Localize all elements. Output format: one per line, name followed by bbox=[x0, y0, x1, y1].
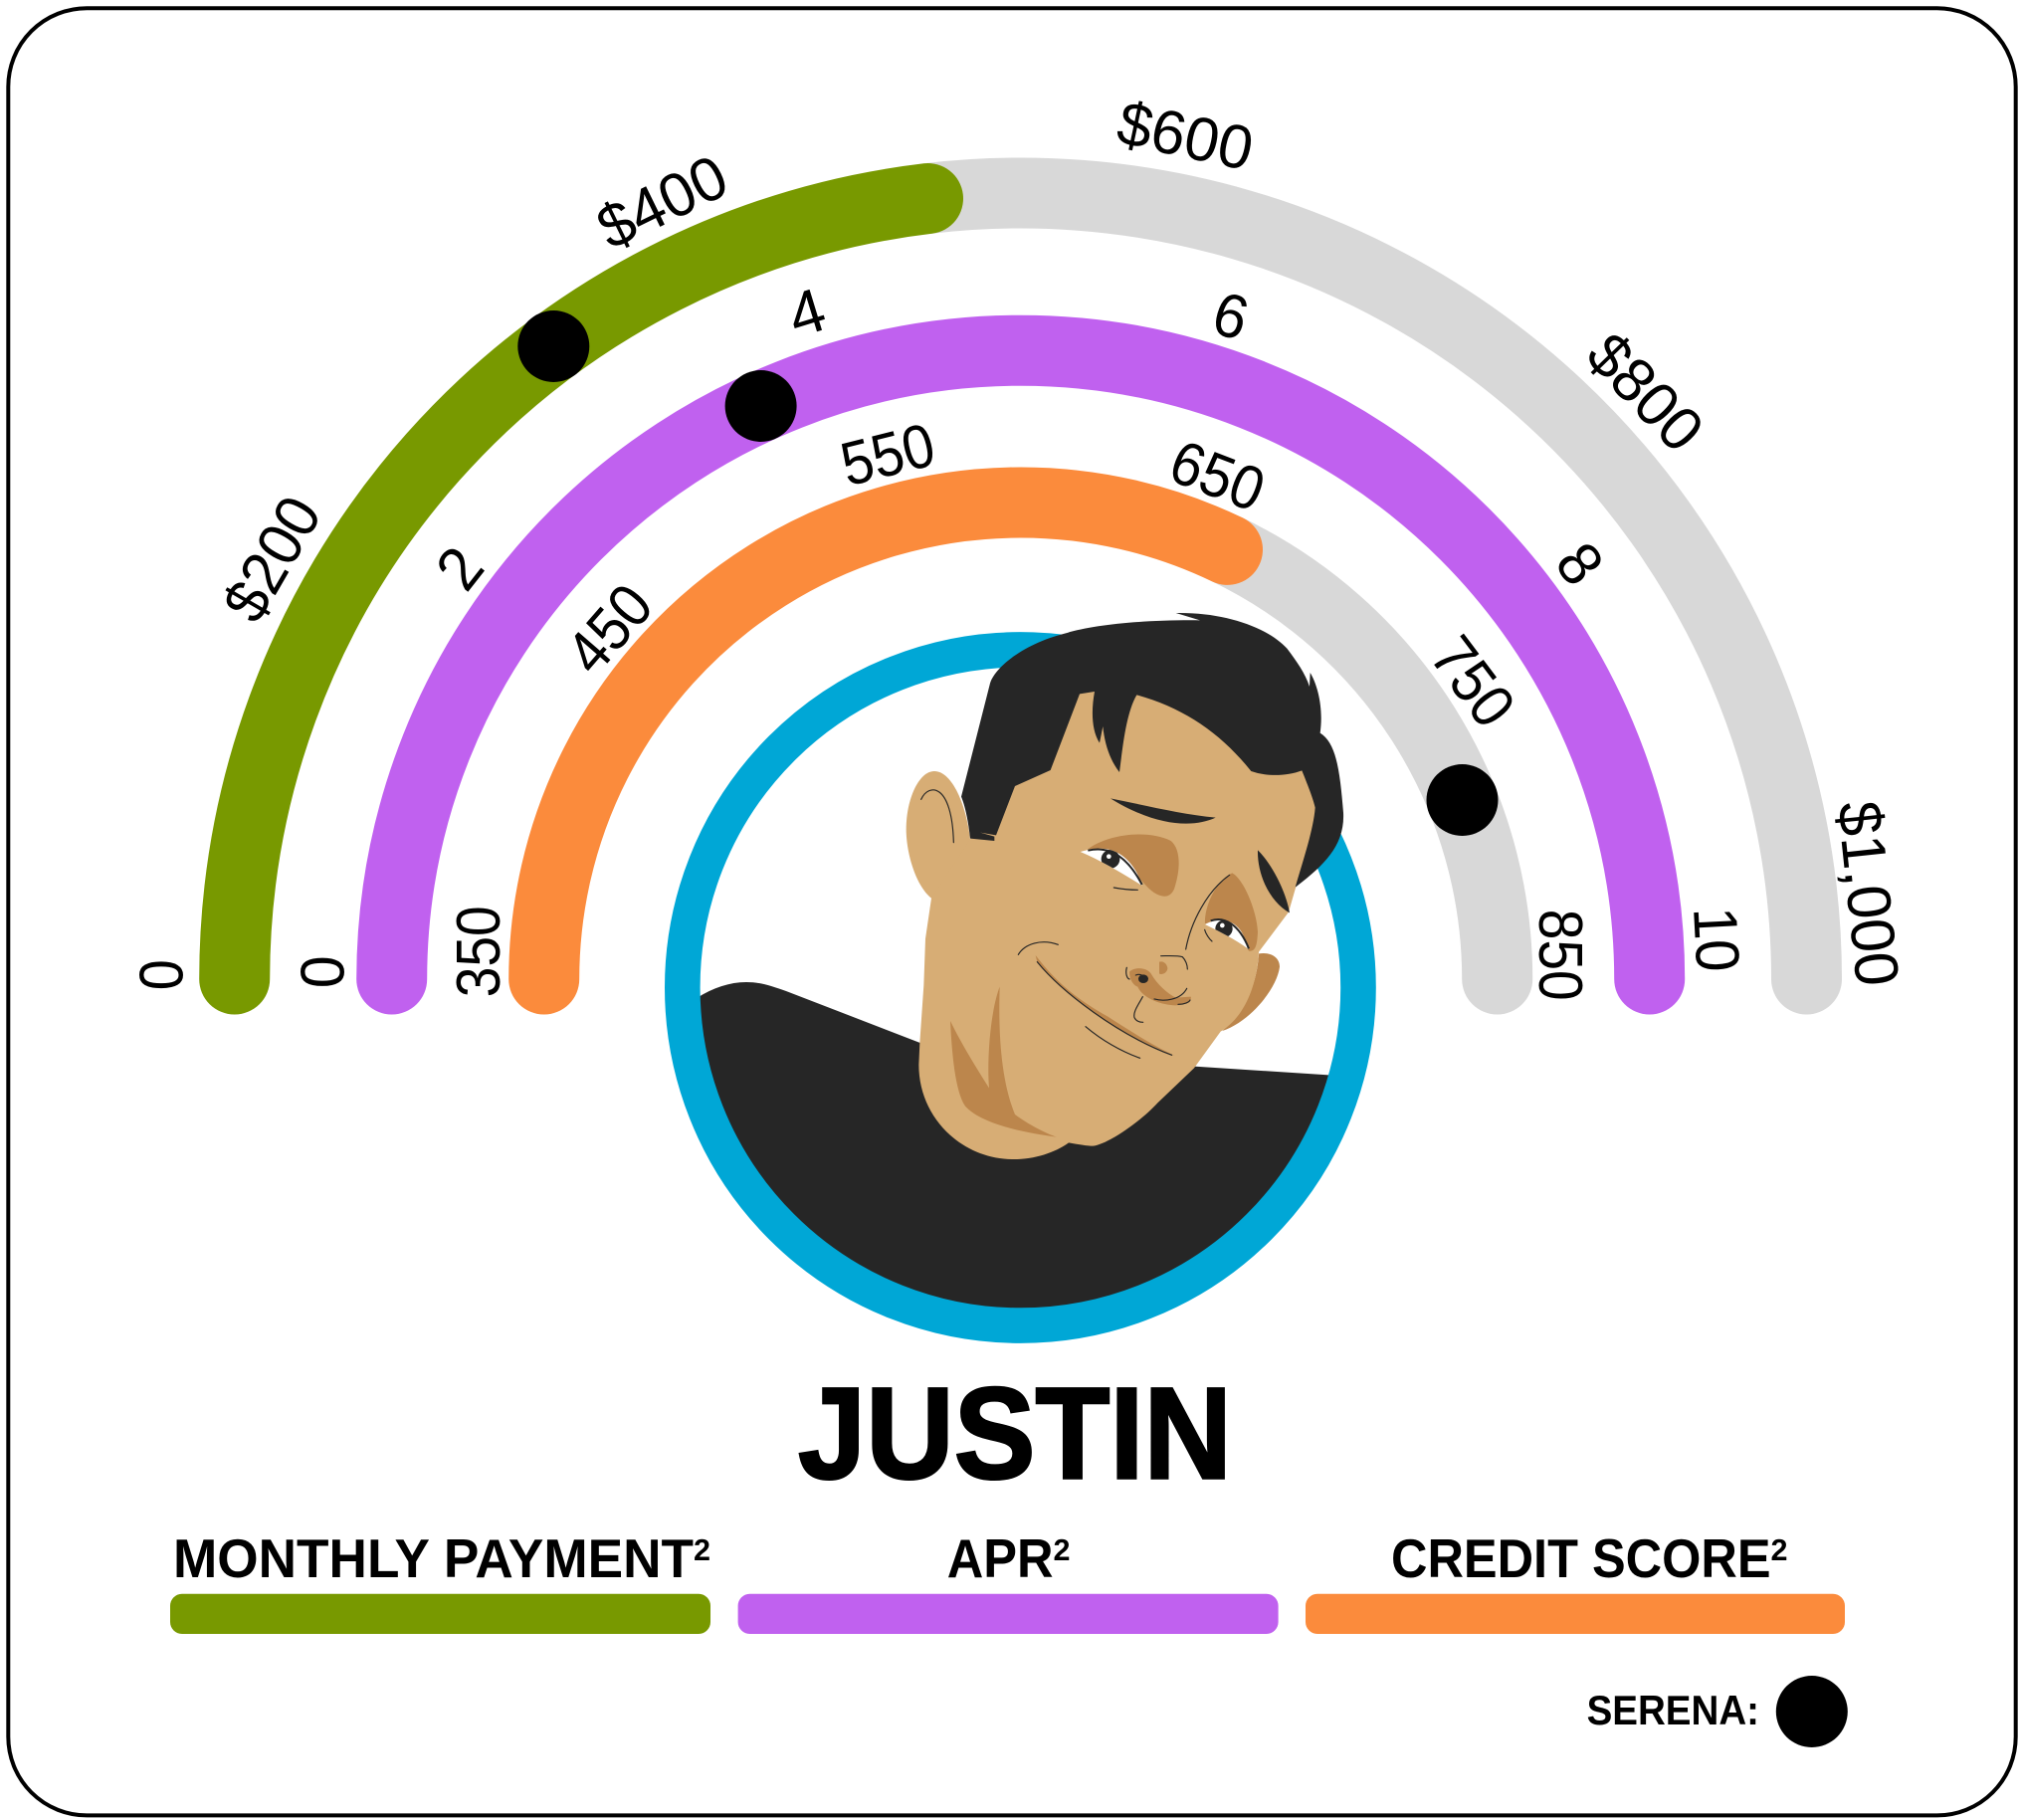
scale labels: APR: 2 bbox=[423, 534, 498, 603]
legend swatch bbox=[170, 1594, 710, 1634]
scale labels: credit score: 650 bbox=[1160, 428, 1274, 525]
scale labels: monthly payment: $800 bbox=[1573, 320, 1717, 466]
footnote marker: 2 bbox=[1771, 1532, 1787, 1567]
portrait: shirt bbox=[701, 982, 1328, 1308]
footnote marker: 2 bbox=[694, 1532, 710, 1567]
marker: Serena credit score bbox=[1427, 764, 1499, 836]
scale labels: monthly payment: $200 bbox=[210, 485, 335, 633]
scale labels: monthly payment bbox=[128, 89, 1912, 990]
credit score track bbox=[1228, 549, 1498, 979]
scale labels: credit score bbox=[445, 411, 1594, 1001]
hair bbox=[961, 613, 1343, 888]
scale labels: monthly payment: 0 bbox=[128, 959, 197, 990]
nostril bbox=[1138, 974, 1148, 983]
marker: Serena payment bbox=[517, 310, 589, 382]
legend label: CREDIT SCORE bbox=[1391, 1527, 1771, 1589]
legend: credit score bbox=[1306, 1527, 1845, 1634]
left eye bbox=[1081, 849, 1142, 886]
legend: Serena marker key bbox=[1587, 1676, 1848, 1747]
Serena dot bbox=[1776, 1676, 1848, 1747]
eyebrows bbox=[1111, 798, 1290, 912]
portrait: blue ring bbox=[683, 650, 1358, 1325]
monthly payment track bbox=[927, 193, 1807, 979]
scale labels: APR: 4 bbox=[780, 276, 834, 351]
legend swatch bbox=[1306, 1594, 1845, 1634]
footnote marker: 2 bbox=[1053, 1532, 1071, 1567]
right ear bbox=[1222, 953, 1280, 1031]
scale labels: monthly payment: $1,000 bbox=[1824, 798, 1912, 989]
credit score value arc bbox=[544, 503, 1228, 979]
nose and mouth shading bbox=[1036, 955, 1191, 1056]
gauge: credit score bbox=[544, 503, 1498, 979]
scale labels: credit score: 450 bbox=[553, 571, 667, 688]
chin shading bbox=[950, 987, 1057, 1137]
face lines bbox=[921, 790, 1230, 1058]
scale labels: APR: 0 bbox=[290, 955, 358, 988]
left ear bbox=[907, 771, 975, 899]
heading: name: JUSTIN bbox=[798, 1359, 1232, 1507]
Serena label: SERENA: bbox=[1587, 1687, 1759, 1733]
scale labels: credit score: 550 bbox=[834, 411, 941, 500]
scale labels: APR: 10 bbox=[1680, 906, 1751, 973]
legend swatch bbox=[738, 1594, 1279, 1634]
scale labels: credit score: 850 bbox=[1525, 910, 1594, 1001]
gauge: APR bbox=[392, 350, 1650, 979]
gauge: monthly payment bbox=[235, 193, 1807, 979]
face bbox=[918, 687, 1321, 1159]
scale labels: APR bbox=[290, 276, 1751, 988]
legend label: APR bbox=[947, 1527, 1053, 1589]
scale labels: APR: 6 bbox=[1205, 279, 1256, 354]
Serena markers bbox=[517, 310, 1499, 836]
scale labels: APR: 8 bbox=[1542, 530, 1617, 598]
scale labels: monthly payment: $600 bbox=[1111, 89, 1259, 184]
scale labels: credit score: 350 bbox=[445, 906, 513, 997]
portrait: head bbox=[907, 613, 1343, 1159]
legend: APR bbox=[738, 1527, 1279, 1634]
monthly payment value arc bbox=[235, 199, 927, 979]
scale labels: credit score: 750 bbox=[1417, 624, 1528, 740]
right eye bbox=[1205, 919, 1249, 949]
scale labels: monthly payment: $400 bbox=[587, 142, 738, 264]
legend: monthly payment bbox=[170, 1527, 710, 1634]
marker: Serena APR bbox=[725, 370, 797, 442]
eye shadows bbox=[1088, 835, 1258, 951]
legend label: MONTHLY PAYMENT bbox=[173, 1527, 694, 1589]
